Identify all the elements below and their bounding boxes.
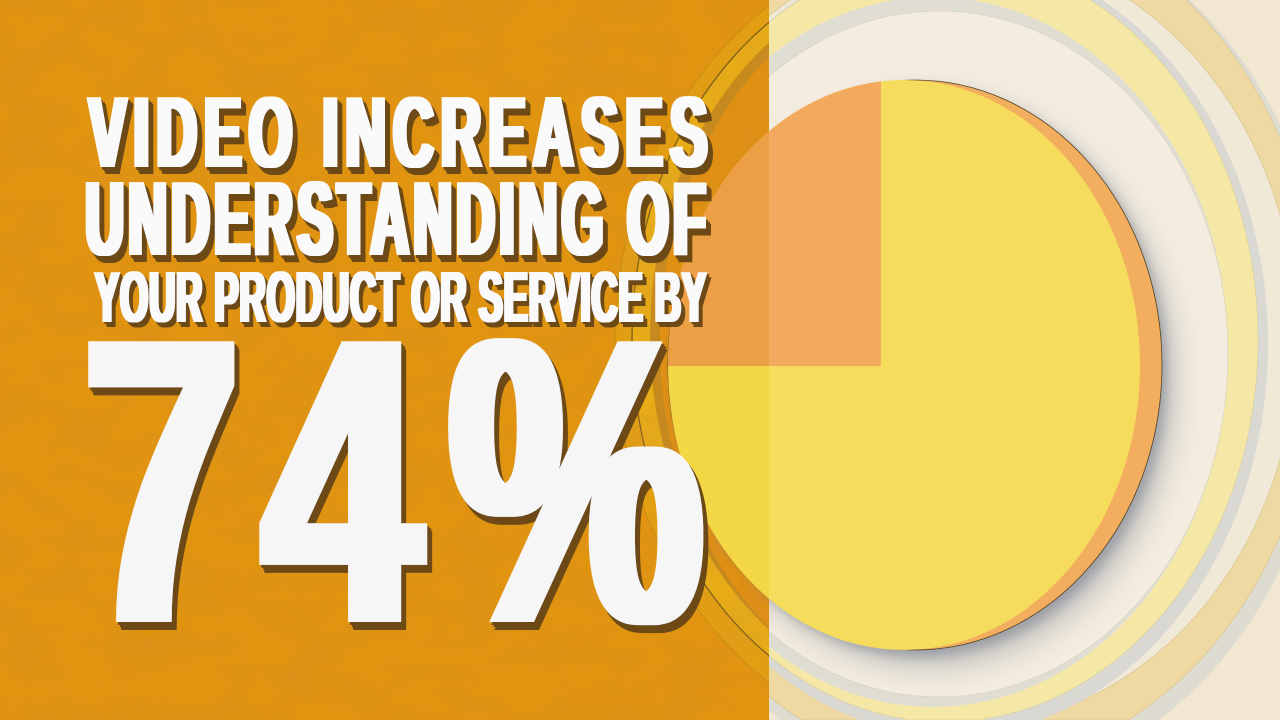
pie chart: 74 percent (660, 70, 1175, 667)
title text (86, 77, 707, 338)
concentric paper rings (769, 0, 1280, 720)
pie tight cast shadow (673, 87, 1167, 657)
panel: orange left block (0, 0, 769, 720)
big number: 74 percent (84, 252, 703, 709)
pie soft cast shadow (769, 92, 1188, 680)
line 1: VIDEO INCREASES (89, 77, 707, 189)
pie base: orange disc (668, 80, 1162, 650)
line 3: YOUR PRODUCT OR SERVICE BY (95, 257, 706, 338)
pie slice: yellow 74 percent (668, 80, 1140, 650)
paper texture on panel (0, 0, 769, 720)
big number: 74 percent: % (449, 252, 703, 709)
pie slice: orange 26 percent quarter (660, 70, 881, 366)
line 2: UNDERSTANDING OF (86, 159, 706, 278)
panel tint over yellow slice (668, 366, 769, 598)
panel tint over orange slice (668, 132, 769, 366)
big number: 74 percent: 4 (263, 254, 423, 709)
big number: 74 percent: 7 (84, 252, 239, 709)
